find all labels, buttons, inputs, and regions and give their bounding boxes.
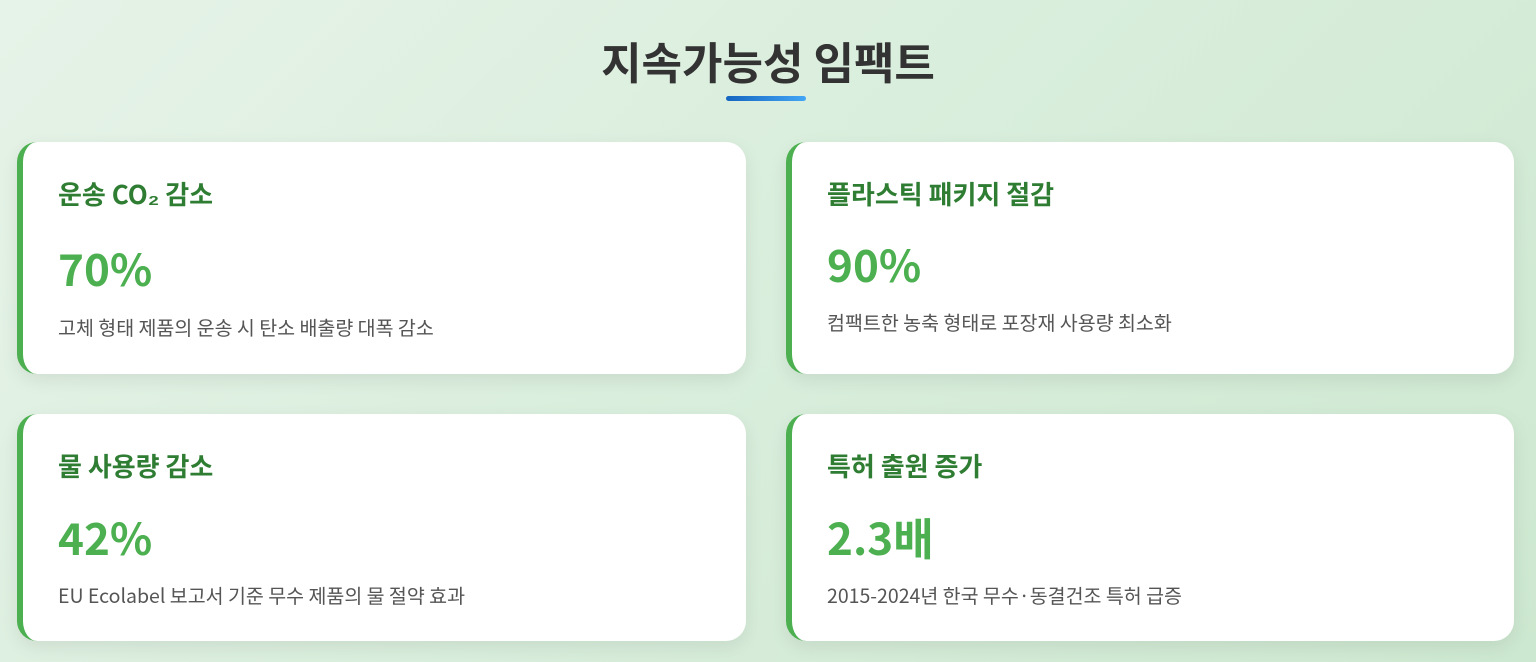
heading: 플라스틱 패키지 절감 [827, 175, 1054, 212]
card: plastic packaging [786, 142, 1514, 374]
title underline [726, 96, 806, 101]
description: 2015-2024년 한국 무수·동결건조 특허 급증 [827, 580, 1182, 609]
number: 70% [58, 235, 152, 299]
description: 고체 형태 제품의 운송 시 탄소 배출량 대폭 감소 [58, 312, 434, 341]
number: 90% [827, 231, 921, 295]
heading: 운송 CO₂ 감소 [58, 175, 213, 212]
heading: 물 사용량 감소 [58, 447, 213, 484]
heading: 특허 출원 증가 [827, 447, 982, 484]
number: 42% [58, 504, 152, 568]
description: EU Ecolabel 보고서 기준 무수 제품의 물 절약 효과 [58, 580, 465, 609]
description: 컴팩트한 농축 형태로 포장재 사용량 최소화 [827, 307, 1172, 336]
card: water [17, 414, 746, 641]
card: transport CO2 [17, 142, 746, 374]
number: 2.3배 [827, 504, 934, 568]
title: 지속가능성 임팩트 [601, 28, 935, 92]
card: patents [786, 414, 1514, 641]
